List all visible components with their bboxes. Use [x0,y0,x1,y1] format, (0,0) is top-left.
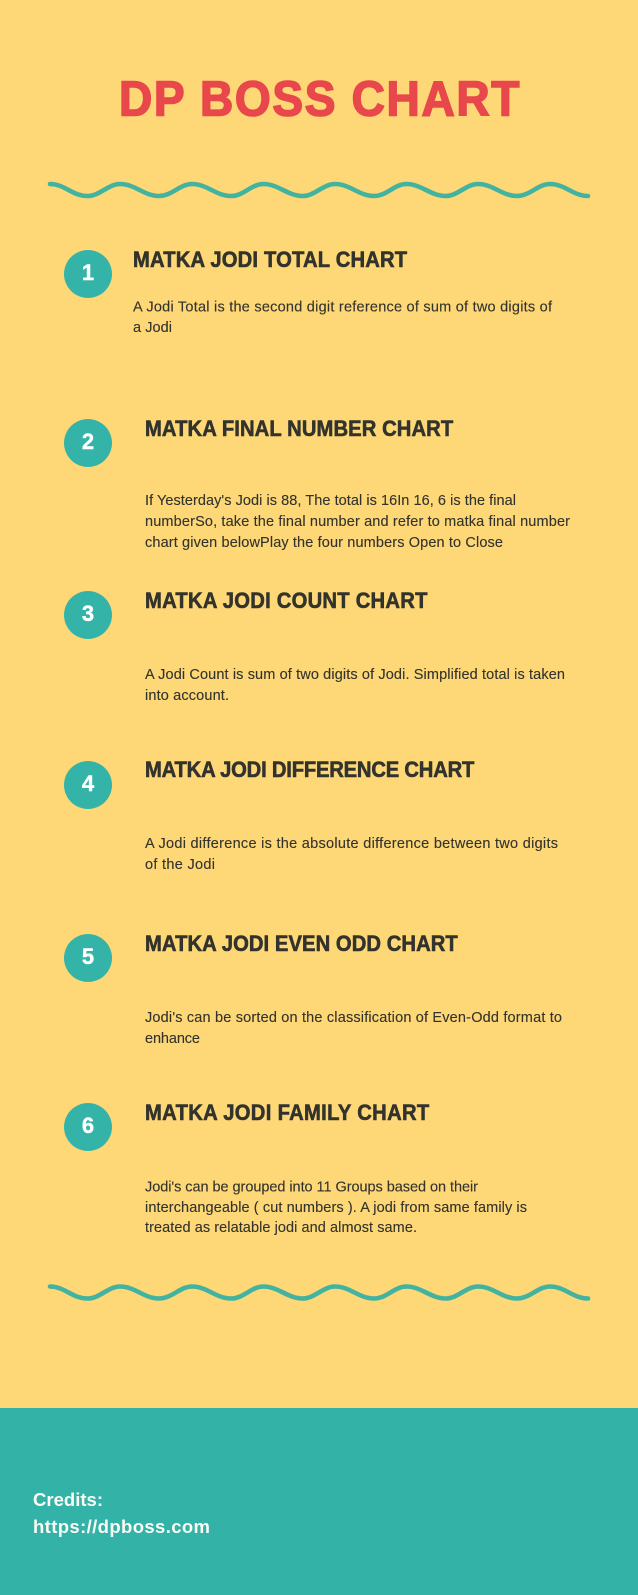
text block: item 4 description: of the Jodi [145,857,215,873]
text block: item 4 description [145,836,558,873]
title: DP BOSS CHART [119,72,519,127]
bottom wavy divider [50,1286,588,1298]
heading: matka jodi count chart: MATKA JODI COUNT CHART [145,589,428,613]
text block: credits: https://dpboss.com [33,1516,210,1537]
icon: number 1 badge: 1 [82,260,94,285]
text block: item 5 description: enhance [145,1031,200,1047]
text block: item 1 description: A Jodi Total is the second digit reference of sum of two digits of [133,300,553,316]
panel: item 2 [64,417,570,551]
top wavy divider [50,184,588,196]
heading: matka jodi difference chart: MATKA JODI DIFFERENCE CHART [145,758,474,782]
panel: item 4 [64,758,558,873]
panel: item 6 [64,1101,527,1236]
text block: item 1 description [133,300,553,336]
text block: item 2 description: If Yesterday's Jodi is 88, The total is 16In 16, 6 is the final [145,493,516,509]
text block: item 2 description: numberSo, take the final number and refer to matka final number [145,514,570,530]
heading: matka jodi total chart: MATKA JODI TOTAL CHART [133,248,407,272]
panel: footer credits [0,1408,638,1595]
heading: matka jodi even odd chart: MATKA JODI EVEN ODD CHART [145,932,458,956]
icon: number 2 badge [64,419,112,467]
text block: item 6 description: treated as relatable jodi and almost same. [145,1220,417,1236]
icon: number 4 badge [64,761,112,809]
icon: number 5 badge [64,934,112,982]
text block: item 3 description: A Jodi Count is sum of two digits of Jodi. Simplified total is taken [145,667,565,683]
icon: number 1 badge [64,250,112,298]
text block: item 5 description [145,1010,562,1047]
text block: item 2 description: chart given belowPlay the four numbers Open to Close [145,535,503,551]
icon: number 5 badge: 5 [82,944,94,969]
text block: item 5 description: Jodi's can be sorted on the classification of Even-Odd format to [145,1010,562,1026]
text block: item 2 description [145,493,570,551]
icon: number 2 badge: 2 [82,429,94,454]
text block: item 6 description [145,1180,527,1236]
footer band [0,1408,638,1595]
icon: number 3 badge [64,591,112,639]
icon: number 6 badge [64,1103,112,1151]
icon: number 4 badge: 4 [82,771,95,796]
text block: item 3 description [145,667,565,704]
text block: credits: Credits: [33,1489,103,1510]
panel: item 5 [64,932,562,1047]
panel: item 1 [64,248,553,336]
text block: item 3 description: into account. [145,688,229,704]
panel: item 3 [64,589,565,704]
heading: matka final number chart: MATKA FINAL NUMBER CHART [145,417,453,441]
icon: number 6 badge: 6 [82,1113,94,1138]
text block: credits [33,1489,210,1537]
text block: item 1 description: a Jodi [133,320,172,336]
icon: number 3 badge: 3 [82,601,94,626]
text block: item 6 description: Jodi's can be grouped into 11 Groups based on their [145,1180,478,1196]
text block: item 4 description: A Jodi difference is the absolute difference between two digits [145,836,558,852]
text block: item 6 description: interchangeable ( cut numbers ). A jodi from same family is [145,1200,527,1216]
heading: matka jodi family chart: MATKA JODI FAMILY CHART [145,1101,429,1125]
